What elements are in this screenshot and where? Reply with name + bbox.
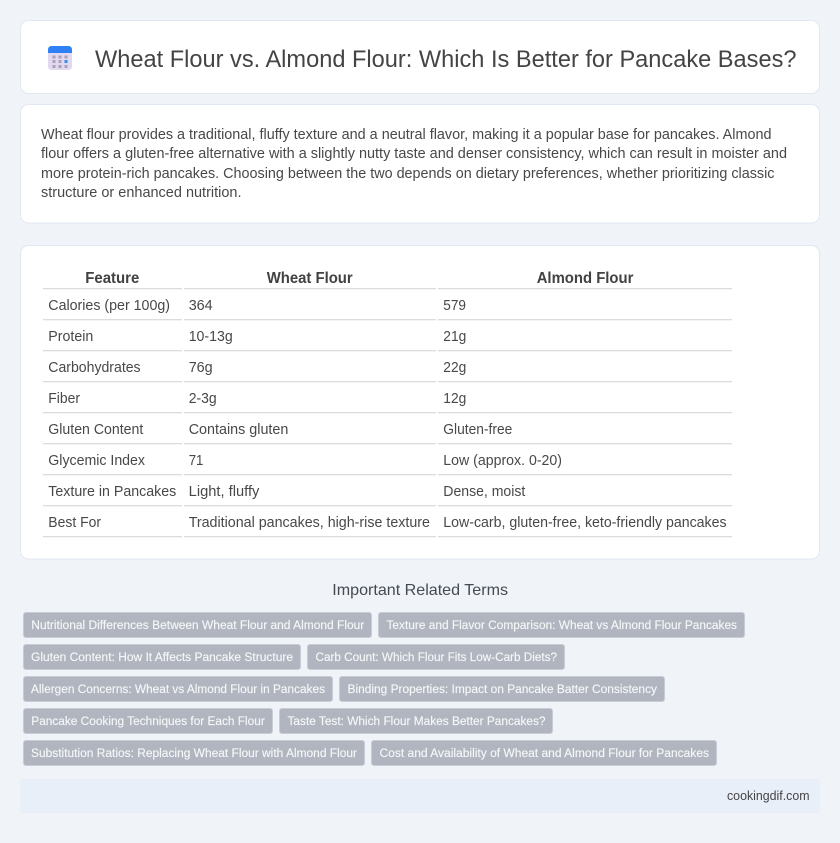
tag: cooking techniques: Pancake Cooking Techniques for Each Flour — [31, 714, 265, 728]
table header row: Feature — [85, 270, 140, 287]
tag: nutritional differences: Nutritional Differences Between Wheat Flour and Almond Flour — [31, 618, 364, 632]
tag: texture and flavor: Texture and Flavor Comparison: Wheat vs Almond Flour Pancakes — [386, 618, 737, 632]
row: carbohydrates: 22g — [443, 360, 466, 376]
icon: calendar — [48, 46, 72, 70]
description text: structure or enhanced nutrition. — [41, 185, 242, 201]
row: gluten content: Contains gluten — [189, 422, 288, 438]
description text: Wheat flour provides a traditional, fluffy texture and a neutral flavor, making it a popular base for pancakes. Almond — [41, 127, 772, 143]
title card background — [20, 20, 820, 94]
row: protein — [48, 329, 466, 345]
row: gluten content: Gluten-free — [443, 422, 512, 438]
row: carbohydrates — [48, 360, 466, 376]
tag: binding properties — [340, 676, 664, 702]
description text: more protein-rich pancakes. Choosing between the two depends on dietary preferences, whether prioritizing classic — [41, 166, 774, 182]
tag: substitution ratios: Substitution Ratios: Replacing Wheat Flour with Almond Flour — [31, 746, 357, 760]
row: calories: 579 — [443, 298, 466, 314]
tag: cooking techniques — [24, 708, 272, 734]
row: best for: Traditional pancakes, high-rise texture — [189, 515, 430, 531]
panel: footer — [20, 779, 820, 813]
tag: substitution ratios — [24, 740, 364, 766]
row: calories — [48, 298, 466, 314]
title: Wheat Flour vs. Almond Flour: Which Is Better for Pancake Bases? — [95, 46, 796, 73]
row: gluten content: Gluten Content — [48, 422, 143, 438]
tag: carb count — [308, 644, 564, 670]
tag: taste test: Taste Test: Which Flour Makes Better Pancakes? — [288, 714, 546, 728]
panel: comparison table — [20, 246, 820, 559]
table card background — [20, 246, 820, 559]
row: texture in pancakes — [48, 484, 525, 500]
tag: cost and availability: Cost and Availability of Wheat and Almond Flour for Pancakes — [380, 746, 709, 760]
row: protein: Protein — [48, 329, 93, 345]
panel: related term tags — [24, 612, 744, 766]
panel: description — [20, 104, 820, 223]
row: glycemic index: Glycemic Index — [48, 453, 146, 469]
tag: allergen concerns — [24, 676, 332, 702]
row: texture in pancakes: Dense, moist — [443, 484, 525, 500]
row: glycemic index: 71 — [189, 453, 203, 469]
table header row — [85, 270, 633, 287]
tag: texture and flavor — [378, 612, 744, 638]
tag: binding properties: Binding Properties: Impact on Pancake Batter Consistency — [348, 682, 658, 696]
row: best for — [48, 515, 727, 531]
row: best for: Best For — [48, 515, 101, 531]
table header row: Wheat Flour — [267, 270, 353, 287]
description text: flour offers a gluten-free alternative with a slightly nutty taste and denser consistency, which can result in moister and — [41, 146, 787, 162]
row: protein: 21g — [443, 329, 466, 345]
row: glycemic index — [48, 453, 562, 469]
tag: nutritional differences — [24, 612, 372, 638]
table header row: Almond Flour — [537, 270, 633, 287]
row: gluten content — [48, 422, 512, 438]
row: fiber: 2-3g — [189, 391, 217, 407]
row: fiber: Fiber — [48, 391, 80, 407]
row: best for: Low-carb, gluten-free, keto-friendly pancakes — [443, 515, 727, 531]
footer source text: cookingdif.com — [727, 789, 810, 803]
row: texture in pancakes: Texture in Pancakes — [48, 484, 176, 500]
row: carbohydrates: Carbohydrates — [48, 360, 141, 376]
description text — [41, 127, 787, 201]
row: carbohydrates: 76g — [189, 360, 213, 376]
row: texture in pancakes: Light, fluffy — [189, 484, 260, 500]
tag: gluten content — [24, 644, 300, 670]
row: glycemic index: Low (approx. 0-20) — [443, 453, 562, 469]
description card background — [20, 104, 820, 223]
tag: taste test — [280, 708, 552, 734]
tag: cost and availability — [372, 740, 716, 766]
footer background — [20, 779, 820, 813]
row: calories: Calories (per 100g) — [48, 298, 170, 314]
row: protein: 10-13g — [189, 329, 233, 345]
row: calories: 364 — [189, 298, 213, 314]
panel: title header — [20, 20, 820, 94]
row: fiber — [48, 391, 466, 407]
tag: allergen concerns: Allergen Concerns: Wheat vs Almond Flour in Pancakes — [31, 682, 325, 696]
table row rules — [43, 288, 732, 537]
row: fiber: 12g — [443, 391, 466, 407]
tag: carb count: Carb Count: Which Flour Fits Low-Carb Diets? — [316, 650, 557, 664]
heading: important related terms: Important Related Terms — [332, 582, 508, 599]
tag: gluten content: Gluten Content: How It Affects Pancake Structure — [31, 650, 293, 664]
